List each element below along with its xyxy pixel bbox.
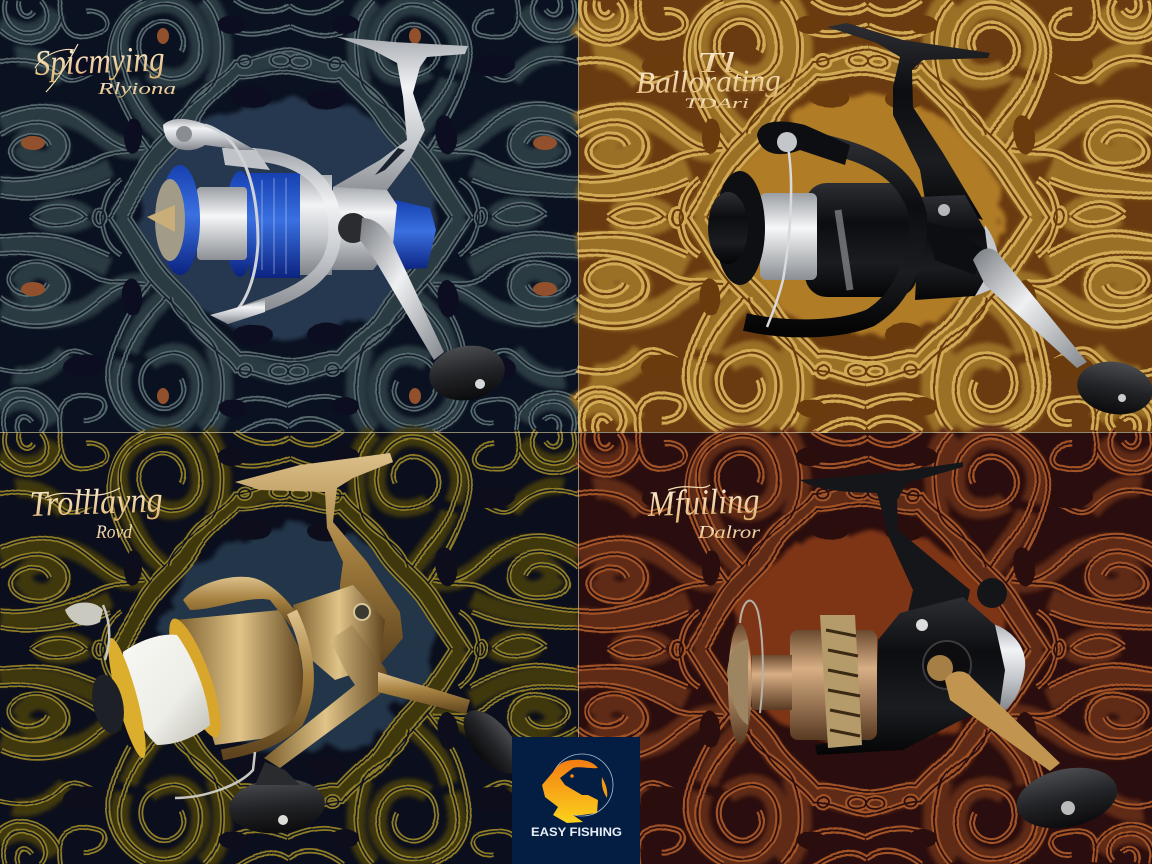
panel: baitcasting reel: [578, 0, 1152, 432]
title: baitcasting reel: Ballorating: [636, 62, 781, 100]
bail wire and roller: [767, 142, 791, 327]
handle connector: [925, 222, 985, 275]
title: baitcasting reel: Tl: [697, 48, 735, 79]
roller arm: [757, 121, 850, 165]
roller: [65, 602, 103, 626]
ornate band: [820, 615, 862, 748]
title: fly fishing reel: Mfuiling: [646, 480, 760, 524]
bail wire: [740, 601, 763, 713]
rear gold flange: [159, 614, 231, 742]
upper arm: [183, 577, 300, 628]
lower bail arm tip: [210, 300, 265, 324]
title: fly fishing reel: [646, 480, 761, 542]
blue rear housing: [392, 200, 436, 270]
drum: [175, 610, 305, 745]
reel stem and foot: [800, 462, 970, 640]
brand name: EASY FISHING: [531, 827, 622, 839]
handle arm: [973, 249, 1087, 368]
icon: fish emblem: [542, 754, 613, 823]
drum: [298, 175, 332, 275]
spool cylinder: [752, 655, 792, 710]
front flange: [160, 165, 200, 275]
logo: easy fishing: [512, 737, 640, 864]
front flange: [715, 171, 765, 285]
reel stem and foot: [827, 23, 990, 220]
handle knob: [1073, 356, 1152, 420]
silver rear cap: [985, 623, 1025, 712]
title: trolling reel: [29, 479, 163, 543]
title: trolling reel: Trolllayng: [29, 479, 163, 524]
title: spinning reel: Rlyiona: [97, 79, 176, 98]
panel: trolling reel: [0, 432, 578, 864]
nose: [87, 672, 129, 736]
title: trolling reel: Rovd: [95, 522, 132, 543]
handle arm: [945, 671, 1060, 771]
rear drum: [790, 630, 877, 740]
panel: fly fishing reel: [578, 432, 1152, 864]
handle knob: [1011, 759, 1123, 837]
handle cap: [338, 213, 368, 243]
title: spinning reel: Spicmying: [34, 38, 165, 83]
drum: [805, 183, 917, 297]
illustration: black reel: [708, 23, 1152, 420]
lower ring arm: [222, 612, 308, 755]
line spool: [197, 187, 247, 260]
handle arms: [264, 625, 388, 768]
front flange: [101, 636, 153, 760]
panel: spinning reel: [0, 0, 578, 432]
reel stem and foot: [235, 453, 403, 665]
body: [293, 585, 385, 680]
body: [915, 195, 990, 300]
drag knob: [977, 578, 1007, 608]
illustration: bronze and black reel: [727, 462, 1123, 837]
roller arm: [163, 119, 255, 150]
silver rear edge: [975, 225, 999, 296]
front flange: [728, 624, 752, 744]
reel stem and foot: [333, 37, 468, 205]
title: fly fishing reel: Dalror: [697, 522, 761, 542]
line spool: [760, 193, 817, 280]
handle pivot: [923, 641, 971, 689]
rear flange: [225, 171, 255, 277]
handle arm: [360, 218, 444, 360]
illustration: silver and blue reel: [147, 37, 509, 406]
bail ring: [745, 140, 918, 328]
title: baitcasting reel: [636, 48, 781, 112]
bail arm ring: [225, 154, 335, 318]
handle knobs: [227, 775, 327, 837]
bail wire: [205, 125, 258, 317]
bail wire: [103, 605, 255, 798]
handle knob: [425, 340, 509, 406]
title: baitcasting reel: TDAri: [684, 96, 749, 112]
black body: [815, 597, 1005, 755]
line spool: [123, 635, 210, 745]
body: [332, 187, 397, 270]
cone nose: [147, 205, 175, 232]
illustration: gold reel: [65, 453, 531, 837]
